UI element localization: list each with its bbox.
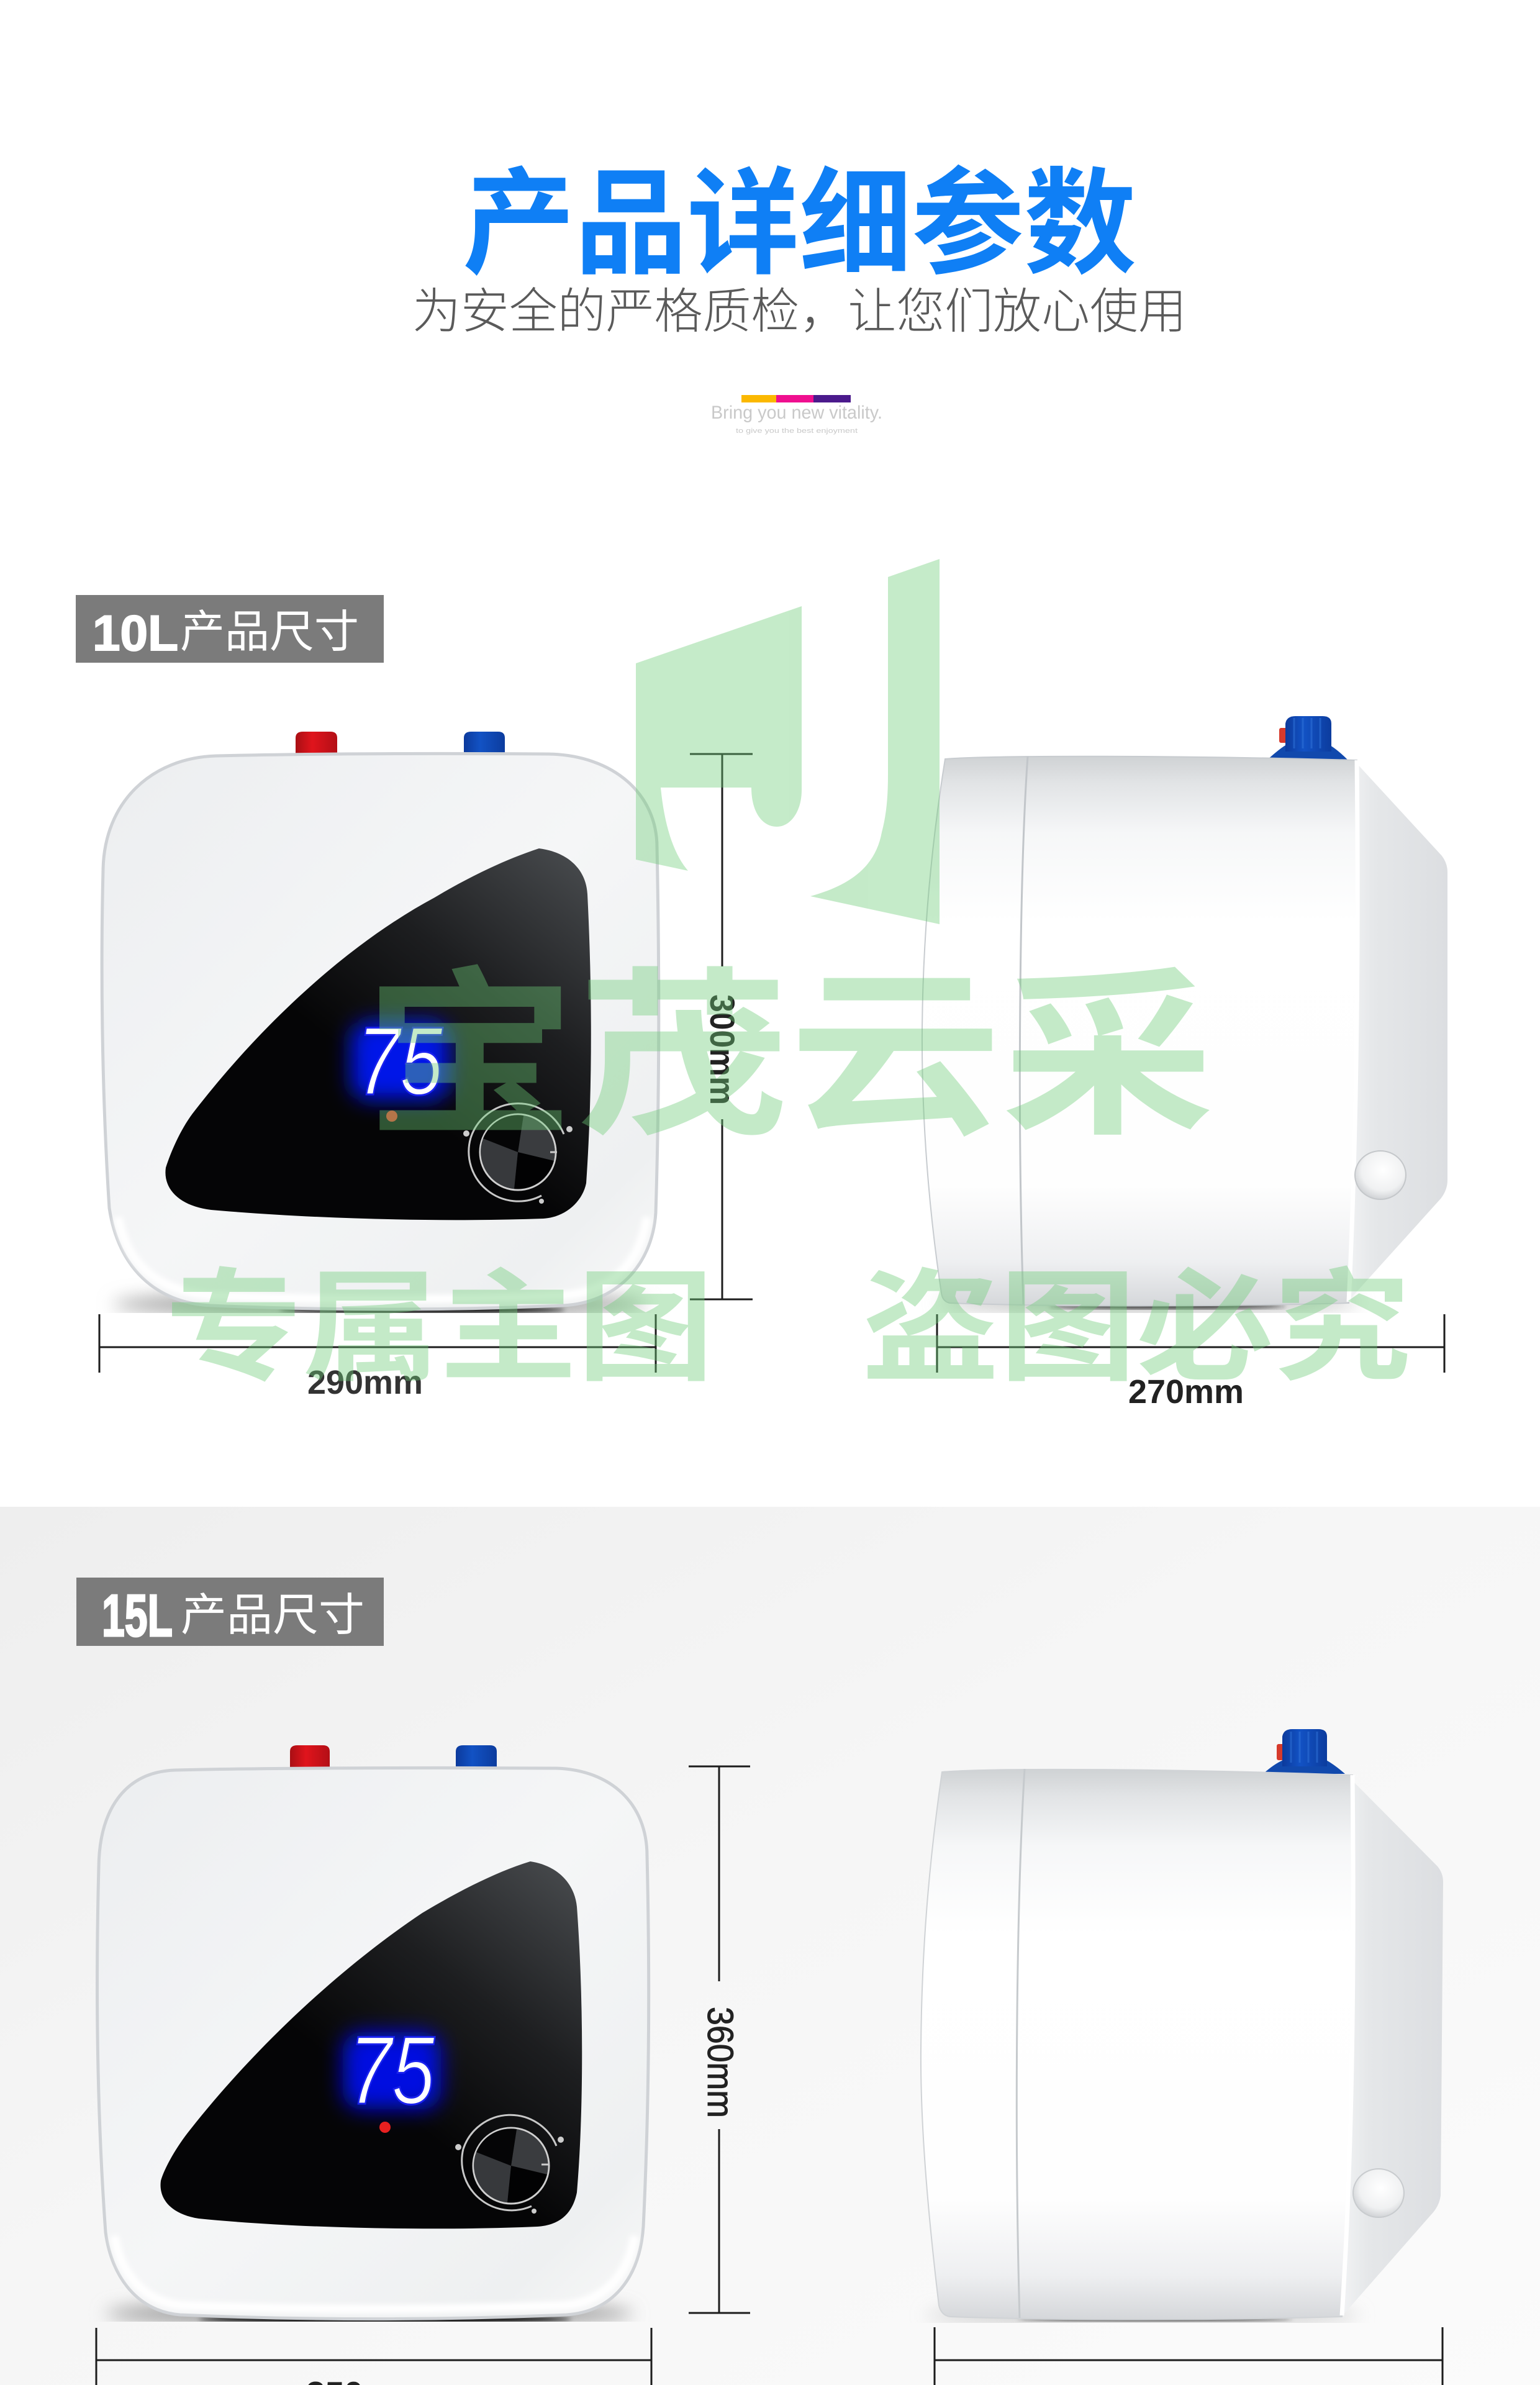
hot water pipe xyxy=(290,1745,330,1770)
floor shadow xyxy=(938,1294,1360,1312)
indicator light xyxy=(386,1111,397,1122)
floor shadow xyxy=(103,2296,636,2322)
subtitle: 为安全的严格质检，让您们放心使用 xyxy=(412,284,1187,338)
dimension: 10L width 290mm: 290mm xyxy=(307,1364,423,1401)
rear cone xyxy=(1335,761,1447,1301)
bottom rim highlight xyxy=(114,2236,635,2309)
valve base xyxy=(1263,1760,1345,1774)
product front view: 10L xyxy=(102,732,659,1318)
valve base xyxy=(1267,745,1348,760)
dimension: 10L height 300mm: 300mm xyxy=(703,994,742,1105)
tank side xyxy=(922,756,1357,1306)
product side view: 15L xyxy=(921,1729,1443,2323)
product side view: 10L xyxy=(922,716,1447,1312)
side button xyxy=(1355,1151,1406,1199)
dimension: 15L depth xyxy=(935,2327,1443,2385)
display glow xyxy=(343,2032,441,2109)
watermark: exclusive image: 专属主图 xyxy=(165,1260,714,1396)
red valve tab xyxy=(1279,728,1288,743)
watermark brand text: 宝茂云采 xyxy=(364,956,1215,1158)
cap seam xyxy=(1017,1769,1025,2318)
cold water pipe xyxy=(456,1745,497,1770)
tri-colour bar xyxy=(741,395,851,402)
tank body xyxy=(97,1768,649,2319)
tank body xyxy=(102,753,659,1309)
floor shadow xyxy=(113,1291,647,1318)
dimension: 15L height 360mm: 360mm xyxy=(700,2007,740,2118)
tank side xyxy=(921,1769,1353,2319)
side button xyxy=(1353,2169,1404,2217)
section background: 15L xyxy=(0,1507,1540,2385)
knob xyxy=(463,1104,573,1204)
indicator light xyxy=(379,2122,391,2133)
slogan small: to give you the best enjoyment xyxy=(736,427,858,435)
watermark logo xyxy=(636,559,940,924)
red valve tab xyxy=(1277,1744,1285,1760)
bottom rim highlight xyxy=(118,1217,647,1299)
product front view: 15L xyxy=(97,1745,649,2328)
tag: 10L xyxy=(76,595,384,663)
tag: 15L: 15L xyxy=(102,1583,173,1649)
cap seam xyxy=(1020,756,1028,1304)
floor shadow xyxy=(925,2308,1360,2323)
title: 产品详细参数 xyxy=(463,160,1136,289)
tag: 10L: 10L xyxy=(93,606,178,661)
tag: 10L: 产品尺寸 xyxy=(180,607,359,657)
slogan: Bring you new vitality. xyxy=(711,402,882,423)
tag: 15L xyxy=(76,1578,384,1649)
cold water pipe xyxy=(464,732,505,755)
page background xyxy=(0,0,1540,1507)
temperature display: 75 xyxy=(357,1007,443,1115)
rear cone xyxy=(1329,1779,1443,2314)
temperature display: 75 xyxy=(349,2017,435,2125)
watermark: theft warning: 盗图必究 xyxy=(862,1260,1411,1396)
rear seam highlight xyxy=(1349,760,1357,1302)
display glow xyxy=(351,1022,449,1100)
blue valve cap xyxy=(1285,716,1331,752)
header block xyxy=(412,160,1187,435)
black control panel xyxy=(161,1861,582,2228)
tag: 15L: 产品尺寸 xyxy=(181,1591,365,1640)
hot water pipe xyxy=(296,732,337,755)
watermark overlay xyxy=(165,559,1411,1396)
dimension: 10L depth 270mm: 270mm xyxy=(1128,1373,1244,1411)
knob xyxy=(455,2115,564,2214)
rear seam highlight xyxy=(1342,1775,1353,2315)
black control panel xyxy=(165,848,591,1220)
blue valve cap xyxy=(1282,1729,1327,1766)
